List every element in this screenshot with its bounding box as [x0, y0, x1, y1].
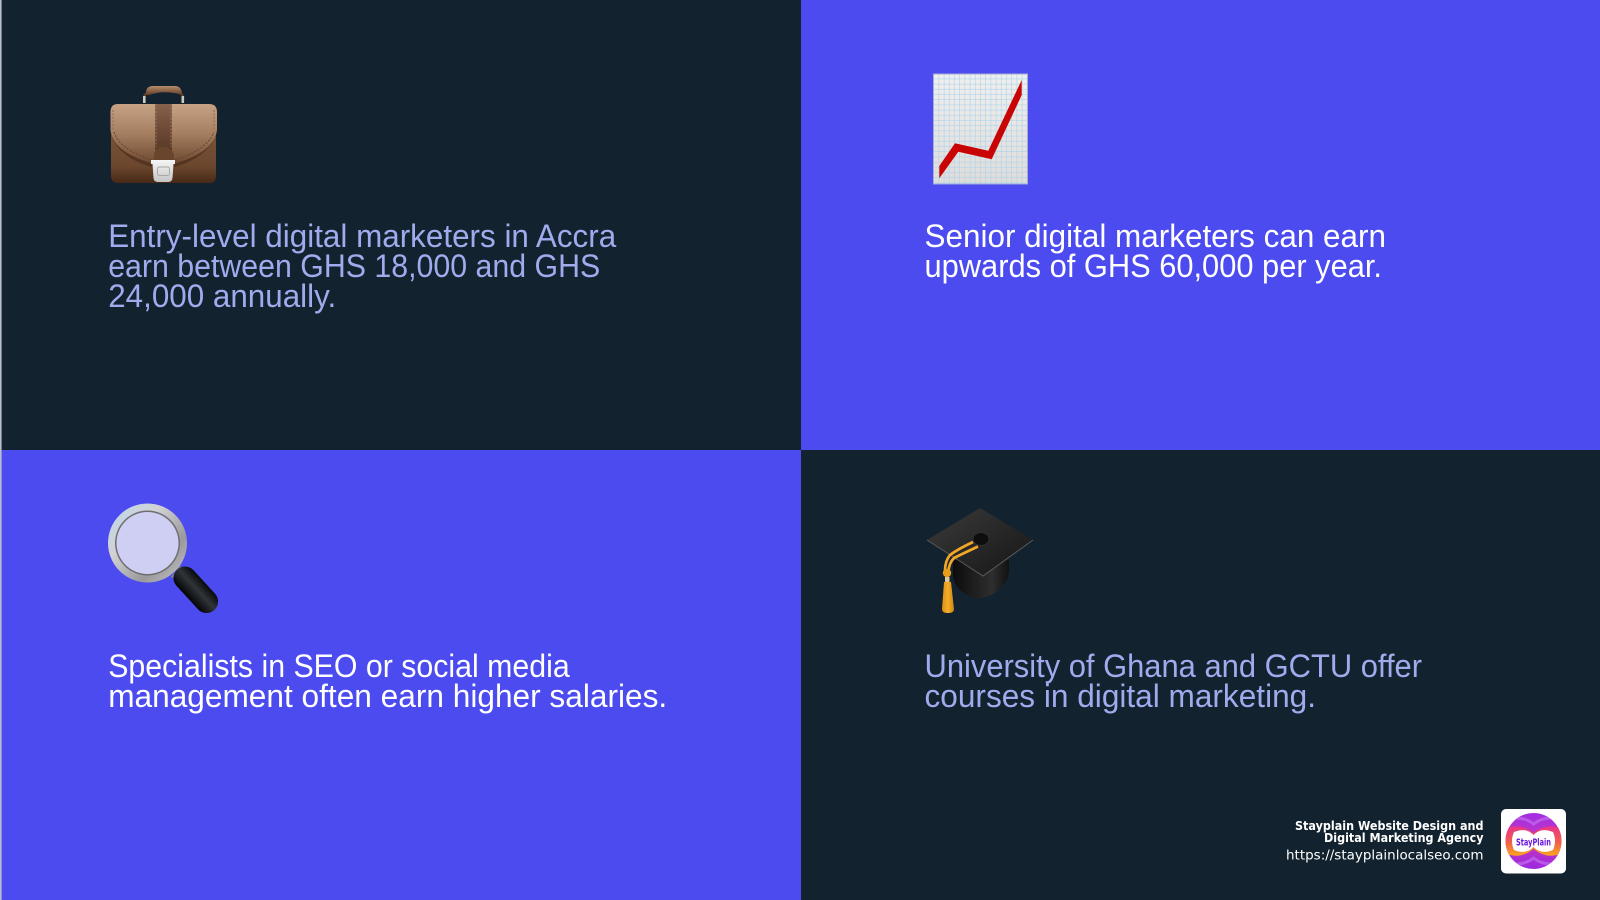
text: entry-level salaries: earn between GHS 18,000 and GHS	[108, 248, 600, 284]
icon: graduation cap	[927, 508, 1033, 613]
agency name and url: Stayplain Website Design and	[1295, 818, 1484, 833]
icon: briefcase	[110, 86, 217, 183]
icon: magnifying glass	[108, 504, 223, 618]
text: specialists: management often earn higher salaries.	[108, 678, 667, 714]
left edge strip	[0, 0, 2, 900]
text: entry-level salaries	[108, 218, 616, 314]
text: specialists	[108, 648, 667, 714]
icon: chart with upward trend	[934, 74, 1028, 184]
text: entry-level salaries: 24,000 annually.	[108, 278, 336, 314]
text: senior salaries: Senior digital marketers can earn	[924, 218, 1386, 254]
agency name and url	[1286, 818, 1484, 864]
panel: entry-level salaries	[0, 0, 801, 450]
panel: specialists	[0, 450, 801, 900]
logo: StayPlain: StayPlain	[1516, 838, 1551, 848]
text: education	[924, 648, 1422, 714]
text: education: University of Ghana and GCTU offer	[924, 648, 1422, 684]
text: senior salaries	[924, 218, 1386, 284]
agency name and url: Digital Marketing Agency	[1324, 830, 1484, 845]
text: education: courses in digital marketing.	[924, 678, 1316, 714]
panel: education	[801, 450, 1600, 900]
agency name and url: https://stayplainlocalseo.com	[1286, 848, 1484, 864]
text: entry-level salaries: Entry-level digital marketers in Accra	[108, 218, 616, 254]
panel: senior salaries	[801, 0, 1600, 450]
logo: StayPlain	[1501, 809, 1566, 874]
text: senior salaries: upwards of GHS 60,000 per year.	[924, 248, 1382, 284]
footer: agency credit	[1286, 809, 1566, 874]
text: specialists: Specialists in SEO or social media	[108, 648, 570, 684]
